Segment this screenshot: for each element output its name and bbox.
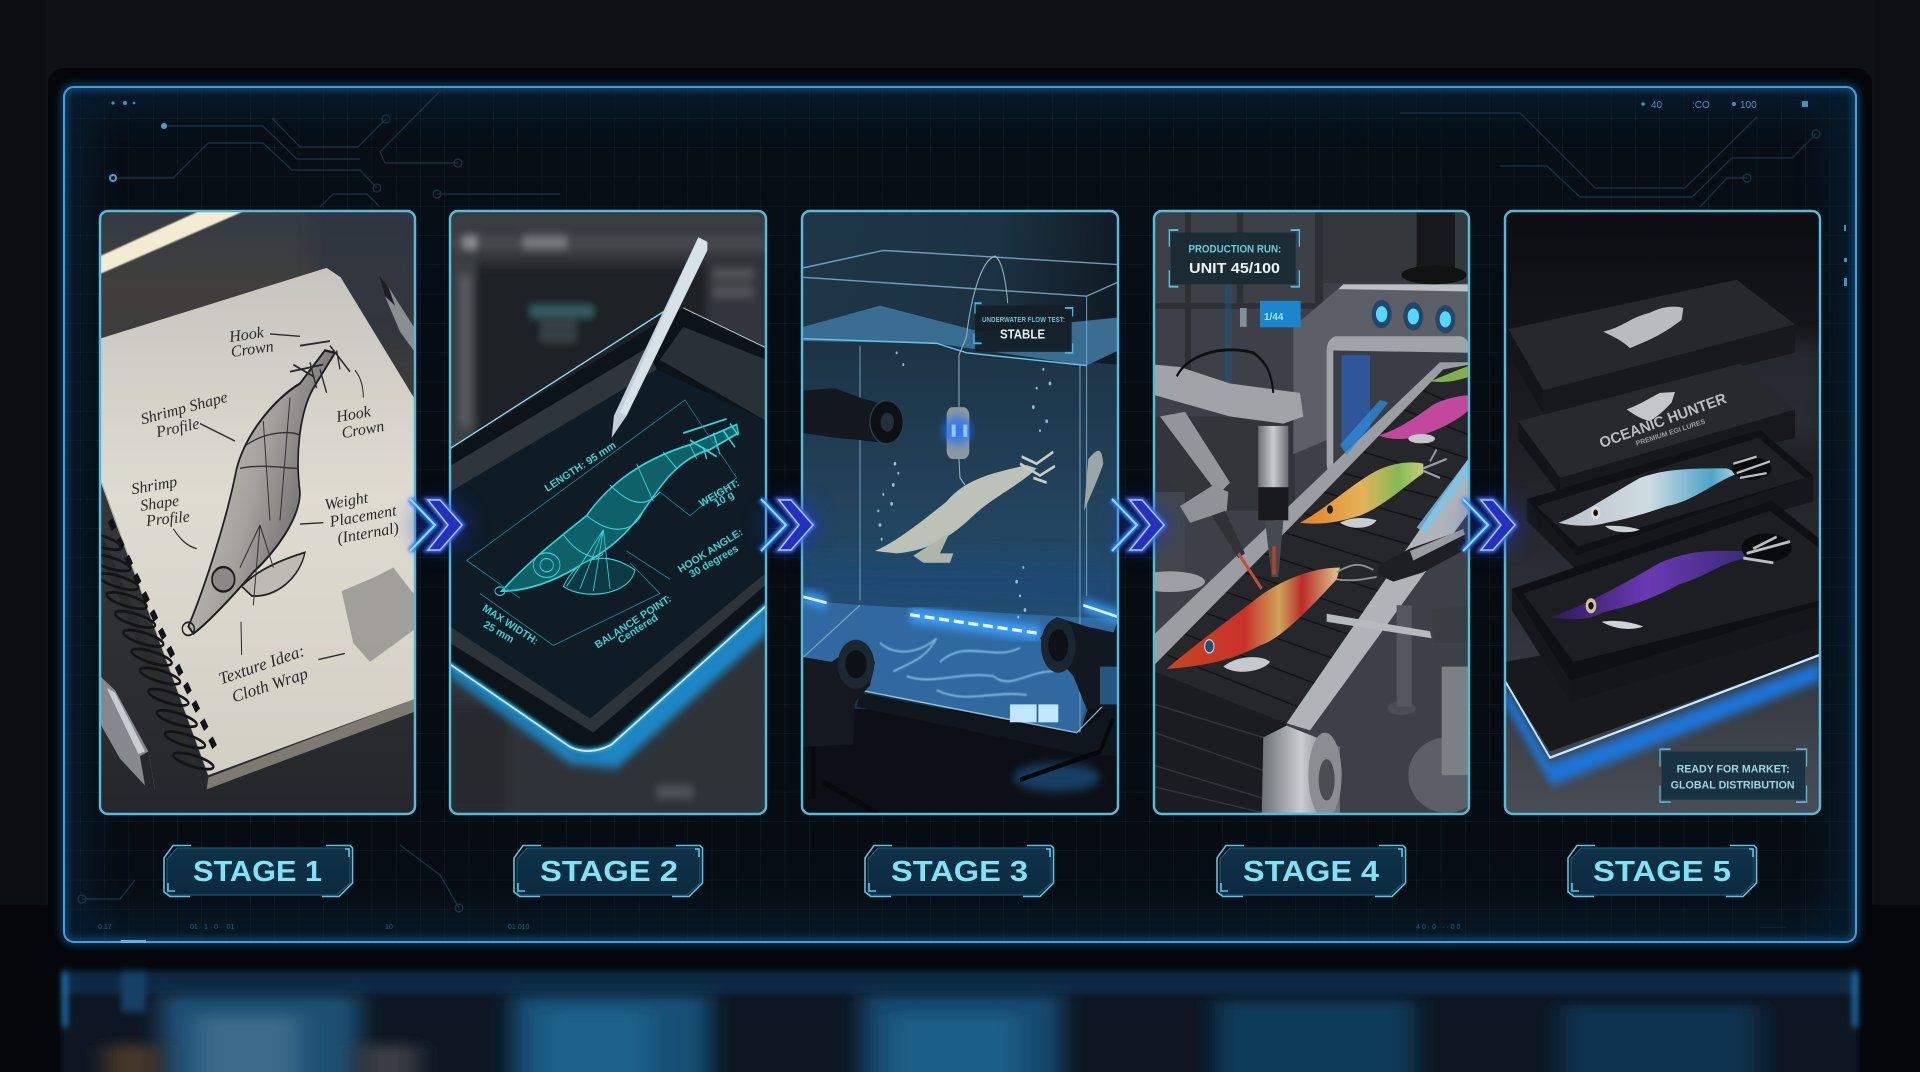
conveyor belt bbox=[1155, 362, 1470, 818]
sensor capsule bbox=[942, 256, 1008, 485]
white squid jig bbox=[875, 451, 1103, 563]
outer glowing HUD frame bbox=[64, 87, 1856, 943]
sketch annotations bbox=[130, 324, 400, 706]
sketch annotations: Shrimp Shape bbox=[139, 389, 230, 428]
lid one bbox=[1508, 280, 1795, 416]
orange lure bbox=[1300, 450, 1447, 528]
HUD status marks: 01 010 bbox=[508, 924, 530, 931]
stage 5 badge: STAGE 5 bbox=[1593, 856, 1731, 888]
lid two bbox=[1518, 364, 1795, 494]
market ready callout: GLOBAL DISTRIBUTION bbox=[1671, 779, 1795, 791]
blue display bbox=[1010, 704, 1058, 722]
panel: stage 2 CAD tablet bbox=[443, 204, 777, 822]
red cloth lure bbox=[1167, 529, 1470, 672]
circuit traces bbox=[78, 88, 1820, 912]
machine housing bbox=[1293, 212, 1470, 478]
stage 3 badge: STAGE 3 bbox=[891, 856, 1028, 888]
CAD labels: BALANCE POINT: bbox=[593, 594, 674, 651]
CAD labels: 30 degrees bbox=[688, 543, 741, 580]
CAD labels: WEIGHT: bbox=[698, 478, 741, 510]
stage 4 badge bbox=[1217, 846, 1406, 896]
sketch annotations: Shrimp bbox=[130, 474, 179, 498]
panel: stage 1 concept sketch bbox=[81, 209, 427, 822]
sketch annotations: Texture Idea: bbox=[216, 641, 307, 688]
HUD status marks bbox=[98, 100, 1847, 931]
HUD status marks: 01 · 1 · 0 ·· 01 bbox=[190, 924, 234, 931]
panel: stage 4 production line bbox=[1155, 212, 1468, 813]
front cameras and tripods bbox=[803, 617, 1118, 813]
stylus bbox=[612, 237, 707, 438]
squid sketch bbox=[182, 341, 415, 662]
arrow: stage 3 to 4 bbox=[1112, 497, 1172, 553]
CAD labels bbox=[480, 440, 745, 651]
arrow: stage 2 to 3 bbox=[761, 497, 821, 553]
flow test callout bbox=[974, 303, 1073, 353]
lid two: PREMIUM EGI LURES bbox=[1635, 418, 1707, 448]
CAD labels: LENGTH: 95 mm bbox=[543, 440, 618, 495]
market ready callout: READY FOR MARKET: bbox=[1677, 763, 1790, 775]
rear camera bbox=[803, 388, 903, 444]
bezel bbox=[48, 68, 1872, 958]
HUD status marks: 0.17 bbox=[98, 924, 112, 931]
sketch annotations: Cloth Wrap bbox=[229, 664, 310, 706]
HUD status marks: 100 bbox=[1740, 100, 1757, 111]
bubbles bbox=[877, 351, 1051, 618]
green lure bbox=[1430, 366, 1470, 382]
pens bbox=[378, 274, 415, 353]
lid two: OCEANIC HUNTER bbox=[1597, 390, 1729, 452]
sketch annotations: Hook bbox=[334, 403, 373, 426]
HUD status marks: :CO bbox=[1692, 100, 1710, 111]
CAD labels: MAX WIDTH: bbox=[480, 603, 540, 647]
panel: stage 5 retail packaging bbox=[1500, 204, 1833, 822]
spiral binding bbox=[101, 518, 217, 771]
tray one bbox=[1527, 430, 1813, 570]
panel borders bbox=[100, 211, 1820, 814]
sketch annotations: Crown bbox=[340, 418, 386, 442]
stage 1 badge bbox=[164, 846, 352, 896]
HUD status marks: ············· bbox=[1760, 925, 1786, 931]
sketch annotations: Profile bbox=[144, 508, 191, 530]
stage 4 badge: STAGE 4 bbox=[1243, 856, 1379, 888]
production run callout: UNIT 45/100 bbox=[1189, 260, 1280, 277]
dimension lines bbox=[467, 400, 737, 645]
stage 5 badge bbox=[1568, 846, 1756, 896]
CAD labels: 10 g bbox=[713, 490, 736, 510]
market ready callout bbox=[1660, 749, 1807, 802]
sketch annotations: Crown bbox=[230, 338, 275, 361]
sketch annotations: Shape bbox=[139, 493, 180, 515]
stage 1 badge: STAGE 1 bbox=[193, 856, 322, 888]
sketch annotations: (Internal) bbox=[336, 520, 400, 547]
robot arms bbox=[1155, 348, 1304, 592]
glowing platform bbox=[1505, 605, 1820, 786]
arrow: stage 4 to 5 bbox=[1463, 497, 1523, 553]
wireframe squid bbox=[495, 419, 738, 595]
CAD labels: HOOK ANGLE: bbox=[676, 527, 745, 576]
pink lure bbox=[1378, 395, 1470, 443]
production run callout: PRODUCTION RUN: bbox=[1188, 243, 1281, 255]
panel: stage 3 water tank test bbox=[793, 204, 1127, 822]
lower right machine bbox=[1388, 605, 1468, 813]
HUD status marks: 40 bbox=[1651, 100, 1663, 111]
stage 2 badge bbox=[514, 846, 702, 896]
sketch annotations: Placement bbox=[327, 502, 398, 531]
arrow: stage 1 to 2 bbox=[410, 497, 470, 553]
control display: 1/44 bbox=[1264, 312, 1284, 323]
stage 3 badge bbox=[865, 846, 1054, 896]
HUD status marks: 4 0 · 0 · · · 0 0 bbox=[1416, 924, 1460, 931]
CAD labels: 25 mm bbox=[481, 620, 515, 646]
sketch annotations: Hook bbox=[227, 324, 266, 346]
CAD labels: Centered bbox=[616, 613, 660, 646]
production run callout bbox=[1169, 230, 1299, 287]
glass tank edges bbox=[803, 250, 1118, 733]
floor reflection bbox=[62, 972, 1858, 1072]
sketch annotations: Weight bbox=[323, 489, 370, 514]
flow test callout: STABLE bbox=[1000, 327, 1045, 342]
stage 2 badge: STAGE 2 bbox=[540, 856, 678, 888]
tray two bbox=[1512, 501, 1820, 702]
control display bbox=[1240, 301, 1301, 327]
sketch annotations: Profile bbox=[154, 415, 201, 441]
flow test callout: UNDERWATER FLOW TEST: bbox=[982, 315, 1065, 324]
HUD status marks: 10 bbox=[385, 924, 393, 931]
